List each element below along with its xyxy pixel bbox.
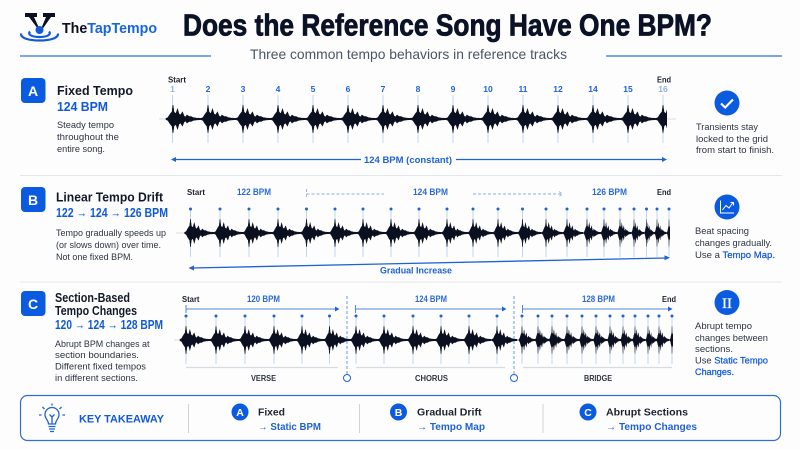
- icon: check: [714, 90, 740, 116]
- chart: fixed waveform: 11: [518, 84, 528, 94]
- panel: C section-based tempo changes: [21, 290, 768, 384]
- note: static tempo changes: [695, 321, 768, 378]
- takeaway C: → Tempo Changes: [606, 422, 697, 433]
- note: tempo map: Use a Tempo Map.: [695, 250, 775, 261]
- panel: A fixed tempo: [21, 76, 774, 166]
- chart: fixed waveform: 14: [588, 84, 598, 94]
- chart: section waveform: VERSE: [251, 374, 277, 383]
- note: static tempo changes: sections.: [695, 344, 733, 355]
- logo: TheTapTempo: TheTapTempo: [62, 20, 157, 37]
- description: [57, 120, 119, 155]
- chart: section waveform: 124 BPM: [415, 294, 447, 304]
- label: key takeaway: KEY TAKEAWAY: [79, 414, 165, 426]
- note: transients: from start to finish.: [696, 145, 774, 156]
- chart: fixed waveform: Start: [168, 76, 186, 84]
- heading: section-based tempo changes: [55, 291, 137, 318]
- chart: section waveform: [174, 294, 680, 383]
- chart: fixed waveform: 7: [381, 84, 386, 94]
- takeaway C: C: [584, 407, 592, 419]
- takeaway C: Abrupt Sections: [606, 408, 688, 418]
- logo: TheTapTempo: [21, 13, 157, 40]
- badge A: [21, 78, 46, 103]
- chart: fixed waveform: 9: [451, 84, 456, 94]
- description: section boundaries.: [55, 350, 139, 361]
- description: in different sections.: [55, 373, 138, 384]
- chart: drift waveform: [176, 187, 677, 257]
- takeaway A: A: [236, 407, 244, 419]
- badge A: A: [28, 83, 38, 99]
- icon: pause bars: II: [722, 296, 732, 312]
- note: transients: Transients stay: [696, 122, 758, 133]
- chart: drift waveform: 122 BPM: [237, 187, 271, 197]
- note: static tempo changes: Use Static Tempo: [695, 356, 768, 366]
- bpm range: 120 → 124 → 128 BPM: [55, 318, 163, 332]
- chart: section waveform: Start: [182, 295, 200, 304]
- chart: fixed waveform: End: [657, 76, 671, 84]
- chart: fixed waveform: [159, 76, 691, 143]
- description: Abrupt BPM changes at: [55, 339, 150, 350]
- takeaway A: [232, 404, 321, 433]
- description: throughout the: [57, 132, 119, 143]
- note: tempo map: [695, 226, 775, 261]
- heading: section-based tempo changes: Section-Based: [55, 291, 130, 305]
- note: static tempo changes: Changes.: [695, 367, 734, 378]
- chart: fixed waveform: 2: [206, 84, 211, 94]
- heading: linear tempo drift: Linear Tempo Drift: [56, 190, 164, 204]
- panel: B linear tempo drift: [21, 187, 775, 276]
- chart: section waveform: End: [662, 295, 676, 304]
- arrow: 124 BPM constant: 124 BPM (constant): [364, 155, 452, 166]
- heading: fixed tempo: Fixed Tempo: [57, 84, 133, 98]
- chart: fixed waveform: 1: [170, 84, 175, 94]
- takeaway B: [390, 404, 485, 433]
- badge B: [21, 187, 46, 212]
- icon: pause bars: [714, 290, 740, 315]
- description: [55, 339, 150, 384]
- panel: key takeaway: [20, 396, 780, 440]
- chart: fixed waveform: 6: [346, 84, 351, 94]
- description: Not one fixed BPM.: [56, 252, 133, 263]
- chart: fixed waveform: 15: [623, 84, 633, 94]
- arrow: 124 BPM constant: [171, 155, 667, 166]
- chart: fixed waveform: 4: [276, 84, 281, 94]
- arrow: gradual increase: Gradual Increase: [380, 266, 452, 276]
- chart: fixed waveform: 16: [658, 84, 668, 94]
- heading: section-based tempo changes: Tempo Changes: [55, 304, 137, 318]
- note: tempo map: Beat spacing: [695, 226, 749, 237]
- note: tempo map: changes gradually.: [695, 238, 772, 249]
- chart: section waveform: 120 BPM: [247, 294, 280, 304]
- description: (or slows down) over time.: [56, 240, 161, 251]
- takeaway A: Fixed: [258, 408, 285, 418]
- bpm range: 122 → 124 → 126 BPM: [56, 206, 168, 220]
- title: Does the Reference Song Have One BPM?: [183, 8, 712, 42]
- note: transients: locked to the grid: [696, 134, 768, 145]
- badge C: [21, 291, 46, 316]
- chart: drift waveform: Start: [187, 188, 205, 197]
- chart: drift waveform: 124 BPM: [413, 187, 448, 197]
- description: [56, 228, 166, 263]
- icon: light bulb: [39, 404, 65, 432]
- badge C: C: [28, 296, 38, 312]
- takeaway A: → Static BPM: [258, 422, 321, 433]
- chart: section waveform: CHORUS: [415, 374, 449, 383]
- note: static tempo changes: changes between: [695, 333, 768, 344]
- subtitle: Three common tempo behaviors in reference tracks: [250, 46, 567, 62]
- chart: fixed waveform: 12: [553, 84, 563, 94]
- bpm value: 124 BPM: [57, 100, 108, 114]
- icon: chart line: [714, 194, 740, 220]
- note: transients: [696, 122, 774, 156]
- chart: fixed waveform: 3: [241, 84, 246, 94]
- description: Different fixed tempos: [55, 362, 146, 372]
- chart: section waveform: BRIDGE: [584, 374, 613, 383]
- arrow: gradual increase: [188, 255, 670, 276]
- takeaway B: Gradual Drift: [417, 408, 482, 418]
- chart: drift waveform: 126 BPM: [592, 187, 627, 197]
- chart: fixed waveform: 8: [416, 84, 421, 94]
- description: Steady tempo: [57, 120, 114, 131]
- chart: fixed waveform: 10: [483, 84, 493, 94]
- description: Tempo gradually speeds up: [56, 228, 166, 239]
- badge B: B: [28, 192, 38, 208]
- chart: fixed waveform: 5: [311, 84, 316, 94]
- takeaway B: → Tempo Map: [417, 422, 485, 433]
- note: static tempo changes: Abrupt tempo: [695, 321, 752, 332]
- takeaway C: [580, 404, 697, 433]
- chart: drift waveform: End: [657, 188, 671, 197]
- description: entire song.: [57, 144, 105, 155]
- takeaway B: B: [395, 407, 403, 419]
- chart: section waveform: 128 BPM: [582, 294, 615, 304]
